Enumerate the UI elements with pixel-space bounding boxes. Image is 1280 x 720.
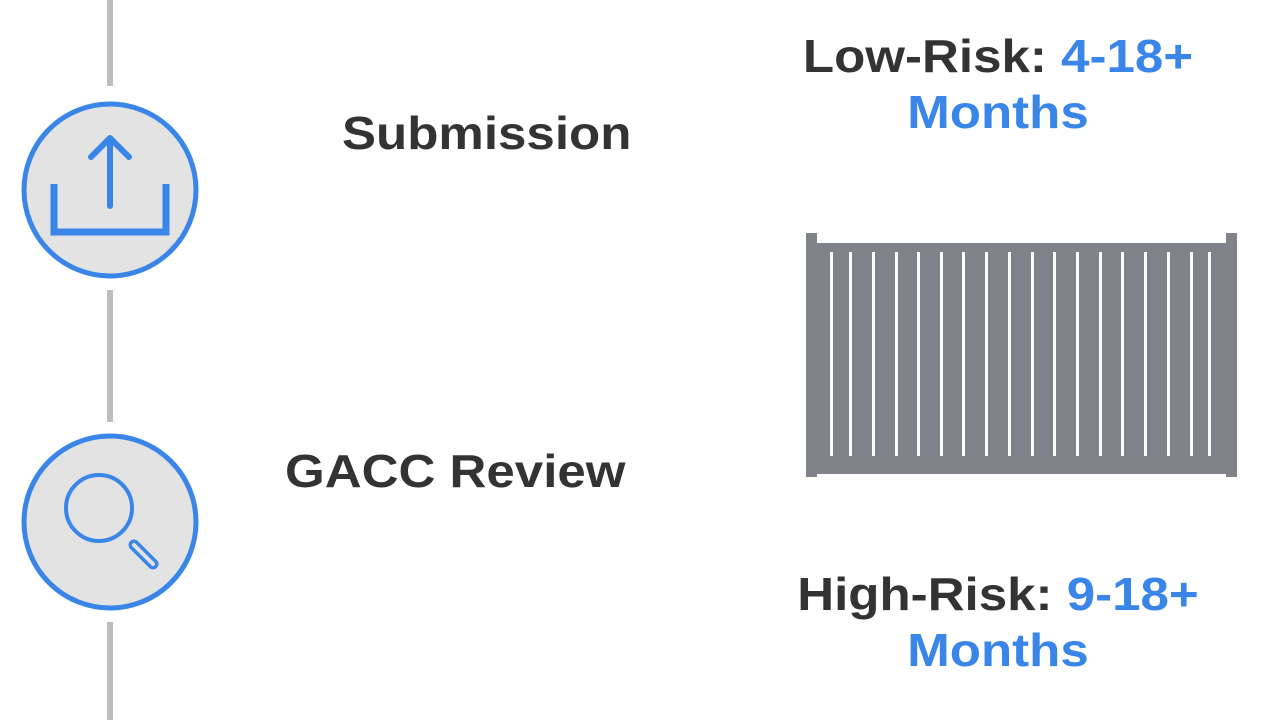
timeline line — [107, 0, 113, 720]
text: low-risk — [803, 30, 1193, 138]
text: low-risk: Months — [907, 86, 1089, 138]
text: high-risk — [797, 568, 1199, 676]
text: low-risk: Low-Risk: 4-18+ — [803, 30, 1193, 82]
heading: Submission: Submission — [342, 107, 631, 159]
text: high-risk: High-Risk: 9-18+ — [797, 568, 1199, 620]
fence — [806, 233, 1237, 477]
heading: GACC Review: GACC Review — [285, 445, 625, 497]
icon: upload — [22, 102, 198, 278]
icon: search — [22, 434, 198, 610]
text: high-risk: Months — [907, 624, 1089, 676]
